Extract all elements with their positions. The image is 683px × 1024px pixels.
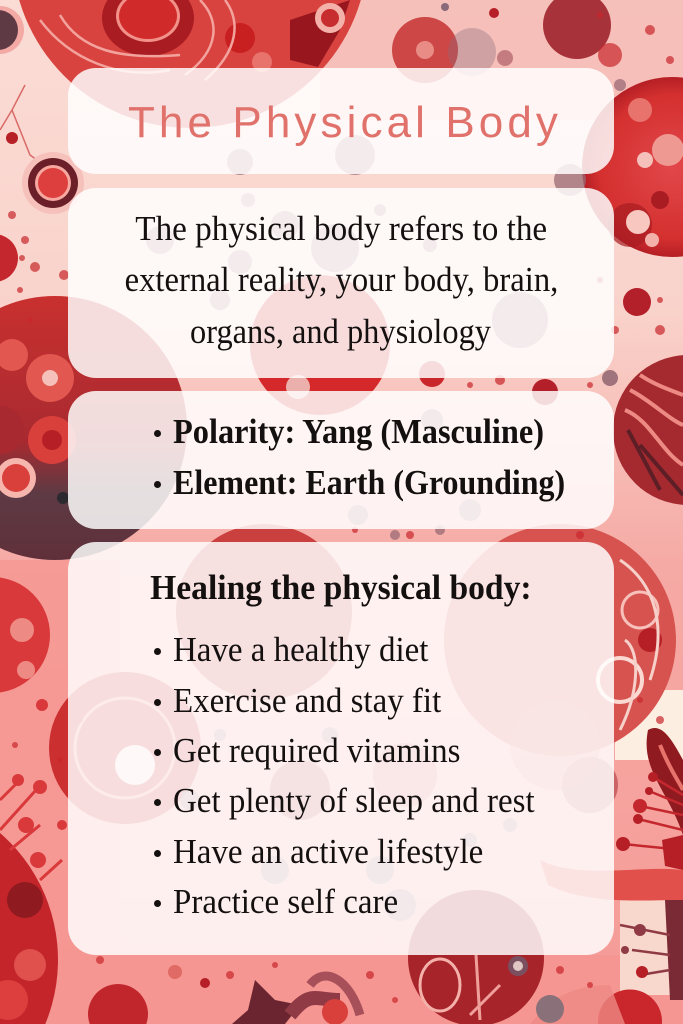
description text: external reality, your body, brain, (124, 260, 558, 299)
big left cell (0, 296, 187, 560)
swirl cell left (49, 672, 201, 824)
ring cell (22, 152, 84, 214)
corner cell (0, 6, 24, 54)
description text: organs, and physiology (190, 312, 491, 351)
bottom cell (408, 890, 544, 1024)
lower right swirl cell (444, 524, 676, 756)
ribbon and strands (540, 728, 683, 1000)
title panel (68, 68, 614, 174)
bottom left cell (0, 792, 58, 1024)
healing heading: Healing the physical body: (150, 568, 532, 607)
panel: healing list (68, 542, 614, 955)
element item: Element: Earth (Grounding) (173, 463, 565, 502)
left lower cell (0, 577, 50, 693)
healing list items: Exercise and stay fit (173, 681, 441, 720)
healing list items: Practice self care (173, 882, 398, 921)
healing list items: Get required vitamins (173, 731, 461, 770)
description text: The physical body refers to the (135, 209, 547, 248)
right dark cell (613, 355, 683, 505)
big top cell (0, 0, 368, 178)
description text (124, 209, 558, 351)
healing list items: Have an active lifestyle (173, 832, 483, 871)
splatter left (0, 699, 67, 880)
right red cell (582, 77, 683, 257)
healing list items: Get plenty of sleep and rest (173, 781, 535, 820)
title: The Physical Body (128, 98, 562, 147)
healing list items: Have a healthy diet (173, 630, 428, 669)
soft colour patches (320, 0, 683, 120)
healing list items (154, 630, 535, 921)
speckles (146, 79, 626, 921)
panel: description (68, 188, 614, 378)
polarity item: Polarity: Yang (Masculine) (173, 412, 544, 451)
centre red cell (250, 275, 390, 415)
panel: polarity and element (68, 391, 614, 529)
